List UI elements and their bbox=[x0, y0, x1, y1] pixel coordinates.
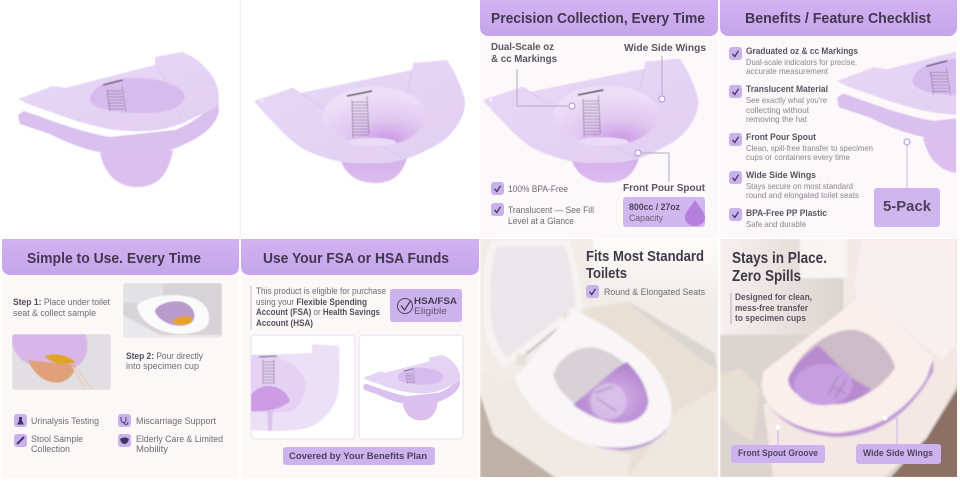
benefit: BPA-free plastic: Safe and durable bbox=[746, 219, 806, 229]
step 2 text: Step 2: Pour directly bbox=[126, 351, 203, 361]
panel: fits most standard toilets bbox=[480, 238, 720, 480]
use case: miscarriage support: Miscarriage Support bbox=[136, 416, 216, 426]
product photo: single hat bbox=[254, 60, 465, 183]
callout: front pour spout bbox=[623, 150, 705, 194]
heading: Precision Collection, Every Time bbox=[491, 11, 705, 27]
benefit: front pour spout: cups or containers every time bbox=[746, 152, 850, 162]
benefits plan pill bbox=[283, 447, 435, 465]
benefits plan pill: Covered by Your Benefits Plan bbox=[289, 451, 427, 462]
checklist item: seats bbox=[586, 285, 705, 298]
benefit: wide side wings: Stays secure on most standard bbox=[746, 181, 853, 191]
use case: elderly care: Mobility bbox=[136, 444, 169, 454]
badge: HSA/FSA eligible: Eligible bbox=[414, 306, 447, 316]
callout: 5-pack: 5-Pack bbox=[883, 198, 932, 215]
benefit: graduated markings: accurate measurement bbox=[746, 66, 829, 76]
use case: elderly care bbox=[118, 434, 223, 454]
callout: wide side wings: Wide Side Wings bbox=[863, 448, 933, 459]
use case: stool sample: Stool Sample bbox=[31, 434, 83, 444]
heading bbox=[586, 250, 704, 278]
capacity badge: Capacity bbox=[629, 213, 663, 223]
checklist item: BPA-free: 100% BPA-Free bbox=[508, 184, 568, 194]
product diagram bbox=[483, 59, 698, 183]
use case: urinalysis: Urinalysis Testing bbox=[31, 416, 99, 426]
use case: stool sample bbox=[14, 434, 83, 454]
benefit: BPA-free plastic bbox=[729, 208, 827, 229]
header bar bbox=[2, 239, 239, 275]
heading: Toilets bbox=[586, 266, 627, 282]
step 2 text: into specimen cup bbox=[126, 361, 199, 371]
benefit: translucent material: See exactly what you're bbox=[746, 95, 827, 105]
callout: wide side wings bbox=[856, 416, 941, 464]
product card: stacked hats bbox=[359, 335, 463, 439]
description text: to specimen cups bbox=[735, 313, 806, 323]
callout: front spout groove bbox=[731, 424, 825, 463]
heading: Fits Most Standard bbox=[586, 249, 704, 265]
benefit: wide side wings bbox=[729, 170, 859, 200]
step 1 text: Step 1: Place under toilet bbox=[13, 297, 110, 307]
panel: stays in place bbox=[720, 238, 960, 478]
heading bbox=[732, 250, 827, 285]
callout: front pour spout: Front Pour Spout bbox=[623, 182, 705, 194]
use case: miscarriage support bbox=[118, 414, 216, 427]
header bar bbox=[480, 0, 718, 36]
callout: dual-scale markings: Dual-Scale oz bbox=[491, 41, 554, 53]
photo: hat in toilet bbox=[123, 283, 222, 338]
heading: Use Your FSA or HSA Funds bbox=[263, 251, 449, 267]
benefit: translucent material: collecting without bbox=[746, 105, 810, 115]
checklist item: BPA-free bbox=[491, 182, 568, 195]
use case: urinalysis bbox=[14, 414, 99, 427]
header bar bbox=[241, 239, 479, 275]
capacity badge: 800cc / 27oz bbox=[629, 202, 680, 212]
checklist item: translucent: Level at a Glance bbox=[508, 216, 574, 226]
benefit: BPA-free plastic: BPA-Free PP Plastic bbox=[746, 208, 827, 218]
product card: close-up bbox=[251, 335, 355, 439]
benefit: translucent material: removing the hat bbox=[746, 114, 808, 124]
benefit: graduated markings: Graduated oz & cc Markings bbox=[746, 46, 858, 56]
photo: toilet with hat bbox=[720, 238, 960, 478]
header bar bbox=[720, 0, 957, 36]
icon: water drop bbox=[685, 200, 705, 226]
callout: dual-scale markings: & cc Markings bbox=[491, 53, 557, 65]
benefit: front pour spout bbox=[729, 132, 873, 162]
benefit: graduated markings: Dual-scale indicators for precise, bbox=[746, 57, 857, 67]
checklist item: translucent bbox=[491, 203, 594, 226]
step 2 text bbox=[126, 351, 203, 371]
description text bbox=[730, 292, 812, 324]
photo: pouring into specimen cup bbox=[12, 334, 111, 390]
callout: 5-pack bbox=[874, 139, 940, 227]
capacity badge bbox=[623, 197, 705, 227]
panel: simple to use bbox=[2, 239, 239, 454]
eligibility text: Account (HSA) bbox=[256, 318, 313, 328]
panel: FSA or HSA funds bbox=[241, 239, 479, 465]
panel: product side view bbox=[18, 52, 219, 187]
callout: front spout groove: Front Spout Groove bbox=[738, 448, 818, 459]
checklist item: seats: Round & Elongated Seats bbox=[604, 287, 705, 297]
panel: product top view bbox=[254, 60, 465, 183]
heading: Benefits / Feature Checklist bbox=[745, 11, 931, 27]
heading: Simple to Use. Every Time bbox=[27, 251, 201, 267]
panel: benefits checklist bbox=[720, 0, 960, 229]
callout: dual-scale markings bbox=[491, 41, 575, 109]
checklist item: translucent: Translucent — See Fill bbox=[508, 205, 594, 215]
benefit: wide side wings: Wide Side Wings bbox=[746, 170, 816, 180]
heading: Stays in Place. bbox=[732, 250, 827, 267]
eligibility text: This product is eligible for purchase bbox=[256, 286, 386, 296]
description text: mess-free transfer bbox=[735, 303, 808, 313]
photo: toilet with hat bbox=[480, 238, 720, 480]
description text: Designed for clean, bbox=[735, 292, 812, 302]
callout: wide side wings: Wide Side Wings bbox=[624, 42, 706, 54]
heading: Zero Spills bbox=[732, 268, 801, 285]
panel: precision collection bbox=[480, 0, 718, 227]
badge: HSA/FSA eligible: HSA/FSA bbox=[414, 296, 458, 306]
benefit: front pour spout: Clean, spill-free transfer to specimen bbox=[746, 143, 873, 153]
use case: stool sample: Collection bbox=[31, 444, 70, 454]
step 1 text bbox=[13, 297, 110, 318]
step 1 text: seat & collect sample bbox=[13, 308, 96, 318]
benefit: translucent material: Translucent Material bbox=[746, 84, 828, 94]
benefit: front pour spout: Front Pour Spout bbox=[746, 132, 816, 142]
eligibility text: using your Flexible Spending bbox=[256, 297, 367, 307]
benefit: graduated markings bbox=[729, 46, 858, 76]
product image bbox=[836, 51, 956, 174]
callout: wide side wings bbox=[624, 42, 706, 102]
badge: HSA/FSA eligible bbox=[390, 289, 462, 322]
eligibility text bbox=[250, 286, 386, 330]
use case: elderly care: Elderly Care & Limited bbox=[136, 434, 223, 444]
eligibility text: Account (FSA) or Health Savings bbox=[256, 307, 380, 317]
benefit: translucent material bbox=[729, 84, 828, 124]
benefit: wide side wings: round and elongated toilet seats bbox=[746, 190, 859, 200]
product photo: stacked hats bbox=[18, 52, 219, 187]
